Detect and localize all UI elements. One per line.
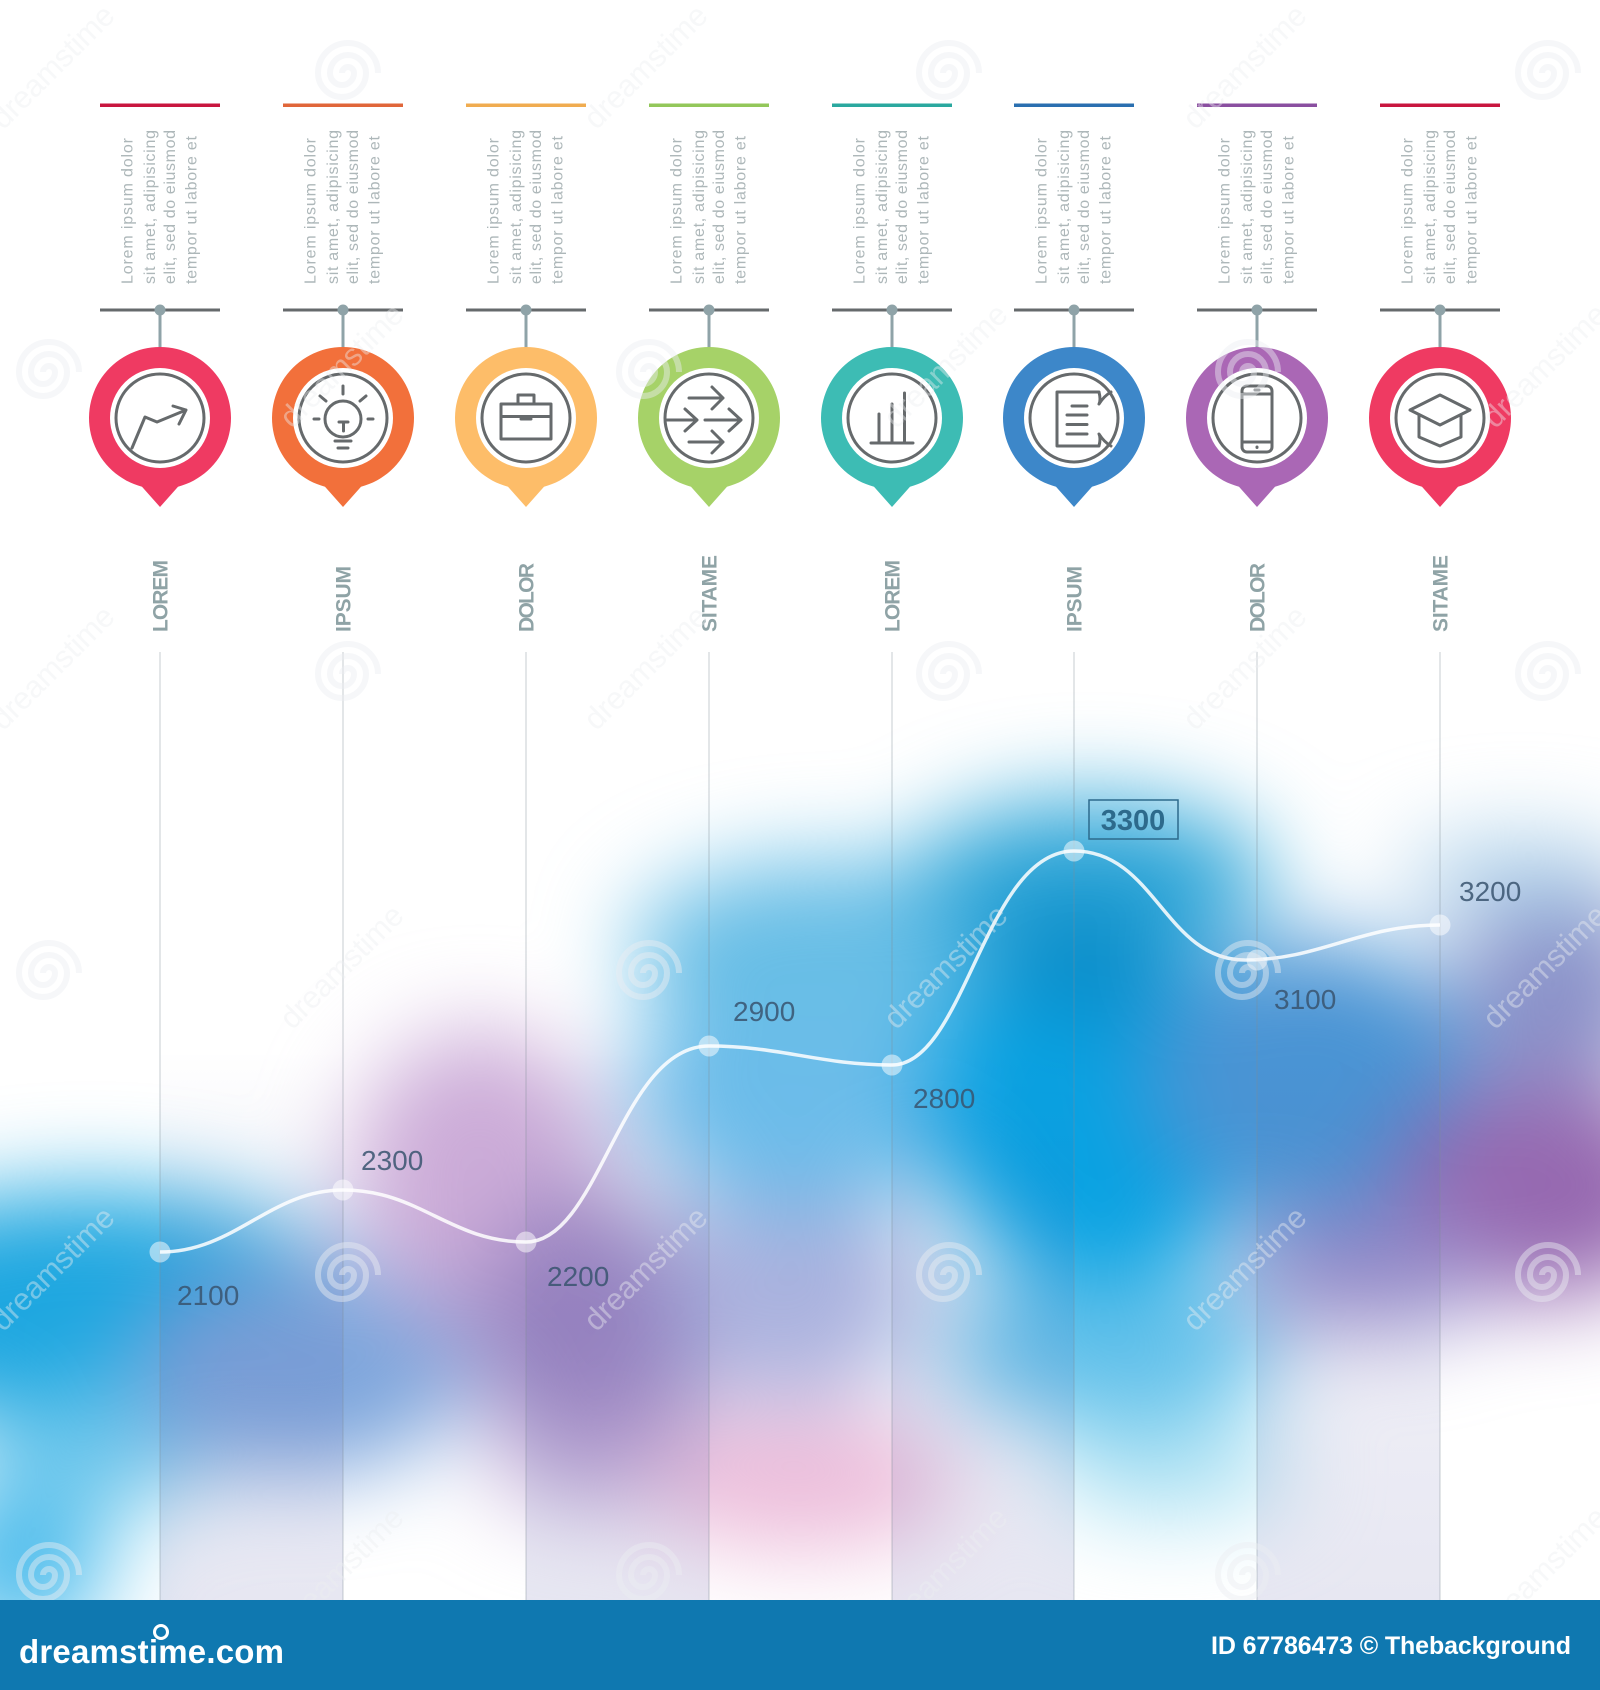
label 5: LOREM <box>882 560 904 632</box>
pin icon: rising chart <box>89 347 231 507</box>
description text 5: tempor ut labore et <box>916 135 932 284</box>
footer logo: dreamstime.com <box>19 1633 284 1670</box>
description text 7: tempor ut labore et <box>1280 135 1298 284</box>
value 2300: 2300 <box>361 1145 423 1176</box>
top rule 5 <box>832 104 952 107</box>
description text 6: tempor ut labore et <box>1098 135 1114 284</box>
description text 8 <box>1400 130 1480 284</box>
description text 4: elit, sed do eiusmod <box>711 130 728 284</box>
footer credit: ID 67786473 © Thebackground <box>1211 1632 1571 1660</box>
value 3300 callout: 3300 <box>1101 805 1165 837</box>
watermarks: dreamstime <box>273 898 411 1036</box>
description text 6 <box>1034 130 1114 284</box>
column 6 header <box>1003 104 1145 632</box>
value 3300 callout <box>1089 800 1178 839</box>
line chart <box>150 800 1521 1311</box>
description text 2: sit amet, adipisicing <box>325 130 342 284</box>
connector 6 <box>1014 304 1134 348</box>
description text 4 <box>668 130 750 284</box>
description text 8: tempor ut labore et <box>1464 135 1480 284</box>
top rule 7 <box>1197 104 1317 107</box>
column guide lines <box>160 652 1440 1600</box>
description text 3 <box>486 130 566 284</box>
description text 2: Lorem ipsum dolor <box>302 137 320 284</box>
description text 6: Lorem ipsum dolor <box>1034 137 1050 284</box>
description text 3: elit, sed do eiusmod <box>528 130 545 284</box>
watermarks: dreamstime <box>877 898 1015 1036</box>
top rule 3 <box>466 104 586 107</box>
value 2200: 2200 <box>547 1261 609 1292</box>
watermarks: dreamstime <box>877 297 1015 435</box>
label 1: LOREM <box>150 560 172 632</box>
connector 1 <box>100 304 220 348</box>
connector 3 <box>466 304 586 348</box>
watermarks: dreamstime <box>577 0 715 136</box>
pin icon: document <box>1003 347 1145 507</box>
description text 8: sit amet, adipisicing <box>1422 130 1439 284</box>
watermarks: dreamstime <box>577 1200 715 1338</box>
label 4: SITAME <box>698 555 722 632</box>
label 2: IPSUM <box>332 566 356 632</box>
description text 3: sit amet, adipisicing <box>508 130 525 284</box>
label 3: DOLOR <box>516 563 538 632</box>
column 2 header <box>272 104 414 632</box>
description text 4: sit amet, adipisicing <box>691 130 708 284</box>
description text 2: elit, sed do eiusmod <box>345 130 362 284</box>
watermarks: dreamstime <box>877 1500 1015 1638</box>
description text 5: sit amet, adipisicing <box>874 130 891 284</box>
connector 2 <box>283 304 403 348</box>
description text 6: sit amet, adipisicing <box>1056 130 1073 284</box>
label 6: IPSUM <box>1064 566 1086 632</box>
pin icon: briefcase <box>455 347 597 507</box>
watermarks: dreamstime <box>273 297 411 435</box>
curve <box>160 851 1440 1252</box>
description text 5 <box>852 130 932 284</box>
value 2800: 2800 <box>913 1083 975 1114</box>
value 3100: 3100 <box>1274 984 1336 1015</box>
connector 7 <box>1197 304 1317 348</box>
value 2100: 2100 <box>177 1280 239 1311</box>
column 1 header <box>89 104 231 632</box>
top rule 1 <box>100 104 220 107</box>
value 3200: 3200 <box>1459 876 1521 907</box>
description text 4: Lorem ipsum dolor <box>668 137 686 284</box>
description text 7 <box>1216 130 1298 284</box>
connector 5 <box>832 304 952 348</box>
pin icon: light bulb <box>272 347 414 507</box>
description text 7: elit, sed do eiusmod <box>1259 130 1276 284</box>
watermarks: dreamstime <box>1176 1200 1314 1338</box>
watermarks: dreamstime <box>577 599 715 737</box>
description text 5: Lorem ipsum dolor <box>852 137 868 284</box>
description text 7: Lorem ipsum dolor <box>1216 137 1234 284</box>
description text 2: tempor ut labore et <box>366 135 384 284</box>
description text 4: tempor ut labore et <box>732 135 750 284</box>
description text 1: elit, sed do eiusmod <box>162 130 179 284</box>
watermarks: dreamstime <box>273 1500 411 1638</box>
watermarks: dreamstime <box>1176 599 1314 737</box>
value 2900: 2900 <box>733 996 795 1027</box>
pin icon: arrows <box>638 347 780 507</box>
alternating column bands <box>160 652 1440 1600</box>
column 8 header <box>1369 104 1511 632</box>
description text 8: Lorem ipsum dolor <box>1400 137 1416 284</box>
column 5 header <box>821 104 963 632</box>
column 4 header <box>638 104 780 632</box>
data points <box>150 840 1450 1262</box>
label 7: DOLOR <box>1246 563 1270 632</box>
pin icon: bar chart <box>821 347 963 507</box>
description text 5: elit, sed do eiusmod <box>894 130 911 284</box>
description text 1: sit amet, adipisicing <box>142 130 159 284</box>
description text 3: Lorem ipsum dolor <box>486 137 502 284</box>
column 3 header <box>455 104 597 632</box>
watermarks: dreamstime <box>1176 0 1314 136</box>
connector 8 <box>1380 304 1500 348</box>
top rule 4 <box>649 104 769 107</box>
connector 4 <box>649 304 769 348</box>
description text 7: sit amet, adipisicing <box>1239 130 1256 284</box>
background: blurred colour cloud <box>0 800 1600 1645</box>
description text 3: tempor ut labore et <box>550 135 566 284</box>
top rule 8 <box>1380 104 1500 107</box>
description text 1: tempor ut labore et <box>184 135 200 284</box>
description text 2 <box>302 130 384 284</box>
column 7 header <box>1186 104 1328 632</box>
footer bar <box>0 1600 1600 1690</box>
description text 1: Lorem ipsum dolor <box>120 137 136 284</box>
top rule 6 <box>1014 104 1134 107</box>
pin icon: graduation cap <box>1369 347 1511 507</box>
label 8: SITAME <box>1430 555 1452 632</box>
description text 8: elit, sed do eiusmod <box>1442 130 1459 284</box>
description text 6: elit, sed do eiusmod <box>1076 130 1093 284</box>
top rule 2 <box>283 104 403 107</box>
description text 1 <box>120 130 200 284</box>
pin icon: smartphone <box>1186 347 1328 507</box>
